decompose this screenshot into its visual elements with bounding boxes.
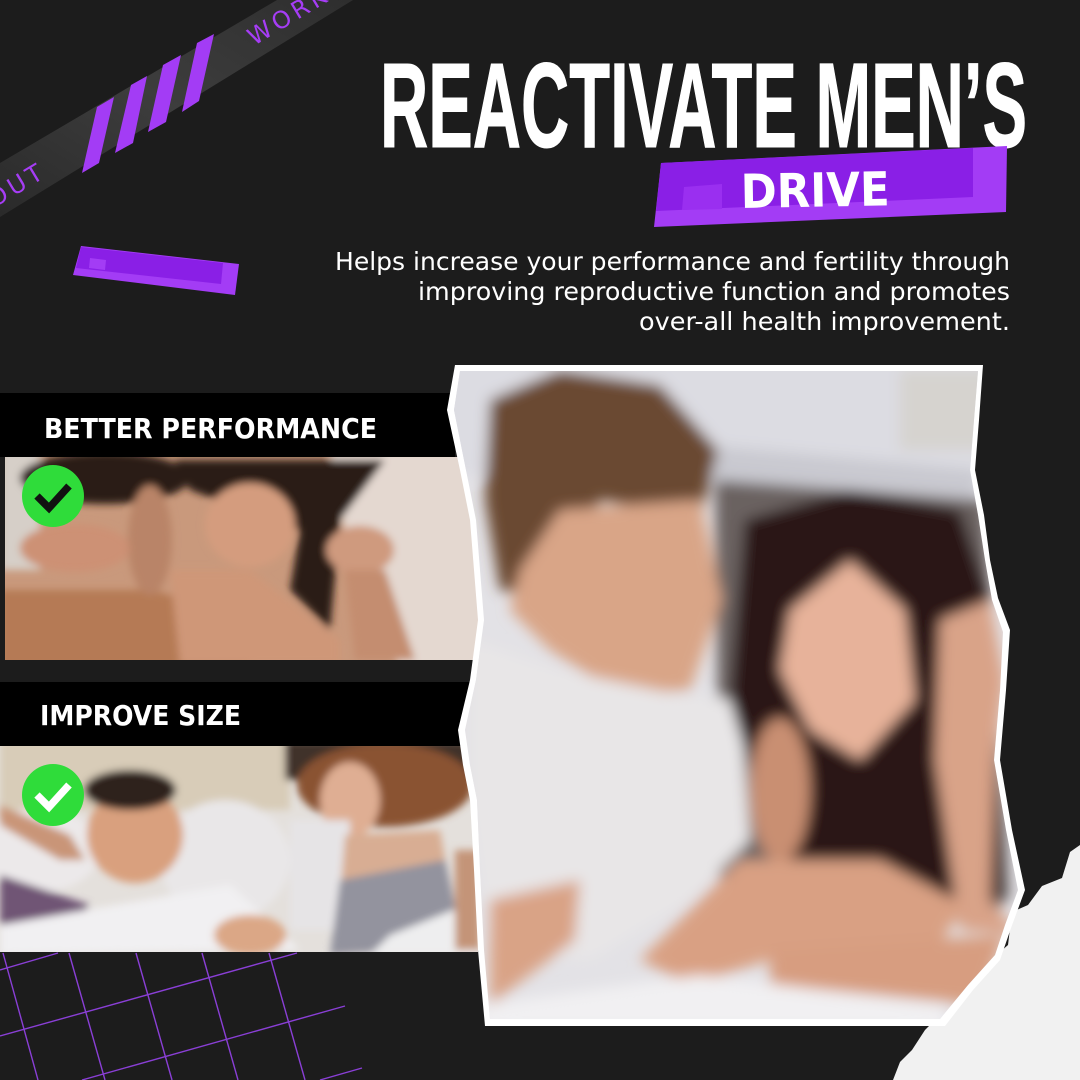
label bar: improve size bbox=[0, 682, 472, 746]
icon: green check badge bbox=[22, 465, 84, 527]
description text: improving reproductive function and promotes bbox=[418, 277, 1010, 306]
panel: improve size bbox=[0, 682, 485, 955]
subheading: drive: DRIVE bbox=[740, 162, 890, 220]
highlight banner: drive bbox=[654, 146, 1007, 227]
purple slanted stripes bbox=[82, 34, 214, 173]
torn white paper corner bbox=[893, 845, 1080, 1080]
label bar: better performance bbox=[0, 393, 455, 457]
photo: couple in bed bbox=[0, 740, 485, 955]
purple decorative bar bbox=[73, 246, 239, 295]
diagonal ribbon with text bbox=[0, 0, 353, 217]
heading: improve size: IMPROVE SIZE bbox=[40, 699, 241, 732]
purple perspective grid bbox=[0, 953, 362, 1080]
description text: over-all health improvement. bbox=[639, 307, 1010, 336]
icon: green check badge bbox=[22, 764, 84, 826]
description text bbox=[335, 247, 1010, 336]
main photo: couple under a blanket, torn white border bbox=[440, 355, 1040, 1040]
photo: couple on white sheets bbox=[5, 457, 478, 660]
panel: better performance bbox=[0, 393, 495, 670]
description text: Helps increase your performance and fertility through bbox=[335, 247, 1010, 276]
heading: better performance: BETTER PERFORMANCE bbox=[44, 412, 377, 445]
